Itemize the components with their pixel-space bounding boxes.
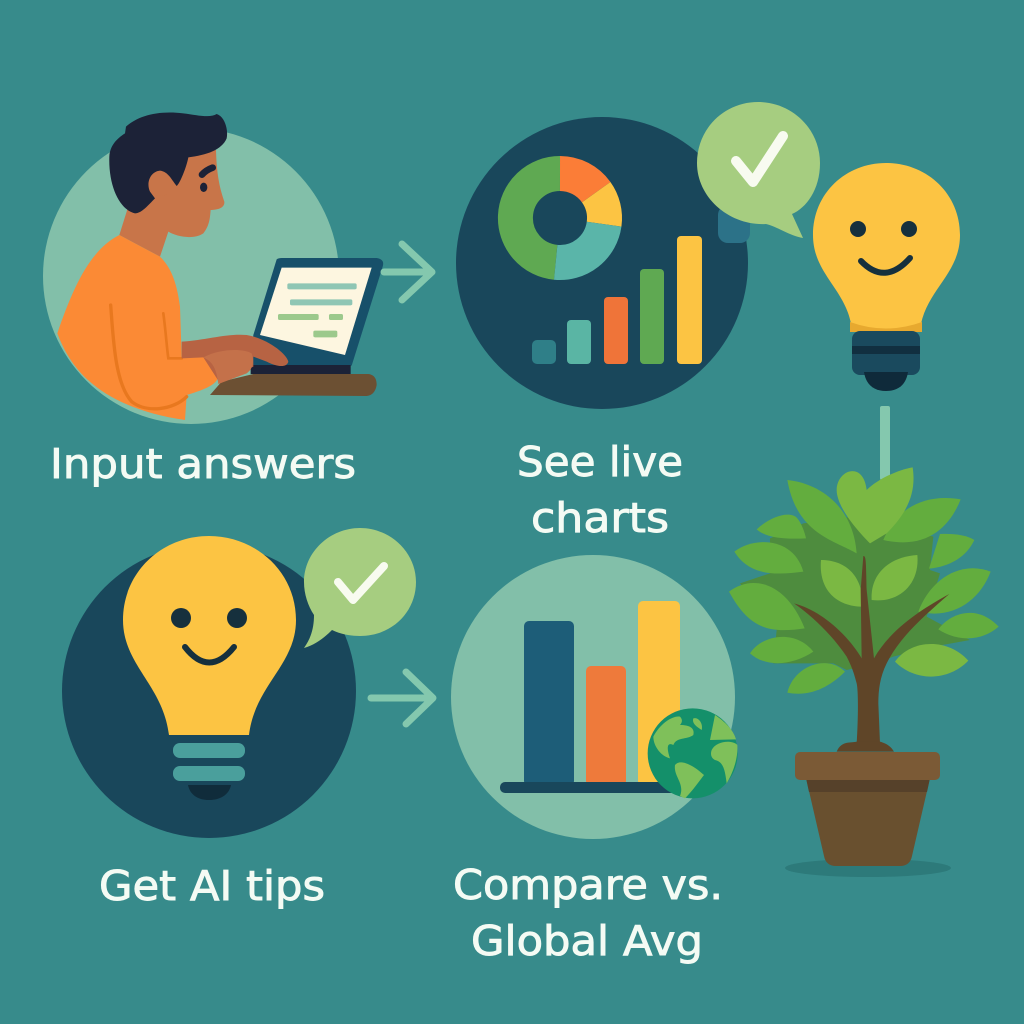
pot [795, 752, 940, 866]
donut chart [515, 173, 605, 263]
step 4: compare chart circle [451, 555, 738, 839]
icon: head and neck [119, 150, 224, 257]
icon: desk [210, 374, 377, 396]
icon: arm and hand [182, 335, 288, 383]
arrow: step 1 to step 2 [384, 244, 432, 300]
label: See live charts [517, 438, 683, 542]
icon: lightbulb [123, 536, 296, 735]
bar chart [500, 601, 680, 793]
label: Compare vs. Global Avg: Global Avg [471, 917, 703, 965]
canopy background [740, 517, 970, 670]
tree foliage and trunk [729, 467, 999, 752]
lightbulb, top right [813, 163, 960, 391]
step 3: AI tips circle with bulb [62, 536, 356, 838]
label: Get AI tips: Get AI tips [99, 862, 325, 910]
light green leaves [821, 467, 968, 677]
icon: orange sweater [57, 235, 218, 420]
trunk and branches [794, 556, 949, 743]
speech bubble with check, top [697, 102, 820, 238]
label: See live charts: See live [517, 438, 683, 486]
label: Input answers: Input answers [50, 440, 356, 488]
arrow: step 3 to step 4 [371, 672, 433, 724]
label: See live charts: charts [531, 494, 669, 542]
label: Compare vs. Global Avg [453, 861, 723, 965]
pot shadow [785, 859, 951, 877]
step 1: person at laptop illustration [43, 112, 383, 424]
label: Compare vs. Global Avg: Compare vs. [453, 861, 723, 909]
bar chart [532, 236, 702, 364]
step 2: live charts circle [456, 117, 750, 409]
connector: bulb to plant [880, 406, 890, 480]
icon: hair [109, 112, 227, 213]
speech bubble with check, lower [304, 528, 416, 648]
plant in pot [729, 467, 999, 877]
mid green leaves [729, 480, 999, 694]
icon: laptop [251, 258, 383, 374]
icon: globe [648, 708, 738, 798]
